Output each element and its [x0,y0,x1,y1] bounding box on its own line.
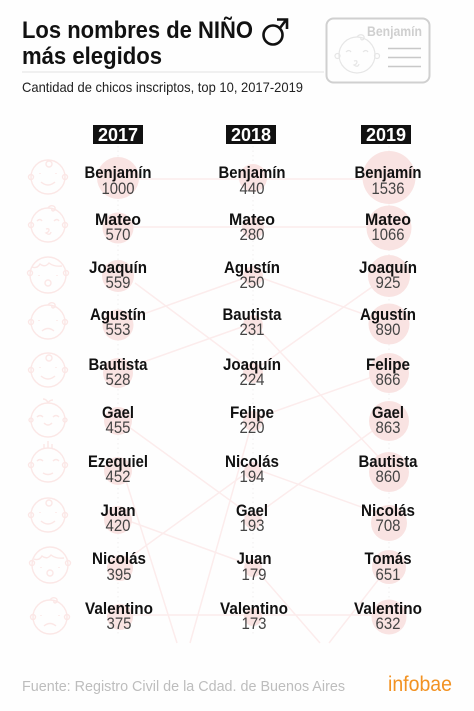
column 2019 names and values: 632 [376,615,400,633]
column 2017 names and values: Bautista [88,356,148,374]
icon: baby 2 [28,206,68,242]
bubbles 2019 [362,151,416,634]
column 2019 names and values: Benjamín [354,164,422,182]
icon: baby 1 [28,160,68,194]
icon: baby 9 [30,547,70,583]
year header 2018: 2018 [231,125,271,145]
column 2017 names and values: Agustín [90,306,146,324]
title: Los nombres de NIÑO [22,16,253,44]
icon: baby 3 [28,257,68,293]
column 2019 names and values: Nicolás [361,502,415,520]
title: más elegidos [22,43,162,70]
column 2018 names and values: Mateo [229,211,275,229]
bubbles 2018 [239,164,267,626]
column 2019 names and values: Valentino [354,600,422,618]
column 2017 names and values: Gael [102,404,134,422]
column 2018 names and values: 250 [240,274,264,292]
column 2018 names and values: 179 [242,566,266,584]
column 2019 names and values: 890 [376,321,400,339]
column 2017 names and values: 1000 [102,180,134,198]
column 2019 names and values: Felipe [366,356,410,374]
column 2018 names and values: Nicolás [225,453,279,471]
icon: name card [326,18,430,82]
column 2017 names and values: 570 [106,226,130,244]
column 2017 names and values: Ezequiel [88,453,148,471]
year header 2017: 2017 [98,125,138,145]
logo: infobae: infobae [388,673,452,696]
column 2018 names and values: 440 [240,180,264,198]
column 2017 names and values: 452 [106,468,130,486]
icon: male symbol [264,20,287,44]
column 2018 names and values: Gael [236,502,268,520]
column 2018 names and values: 173 [242,615,266,633]
column 2019 names and values: 860 [376,468,400,486]
column 2019 names and values: Bautista [358,453,418,471]
column 2017 names and values [84,164,153,633]
column 2019 names and values [354,164,422,633]
column 2017 names and values: Joaquín [89,259,147,277]
column 2017 names and values: 420 [106,517,130,535]
column 2017 names and values: 395 [106,566,132,584]
column 2018 names and values: 231 [240,321,264,339]
column 2018 names and values [218,164,288,633]
column 2017 names and values: 553 [106,321,130,339]
column 2018 names and values: 220 [240,419,264,437]
column 2018 names and values: 280 [240,226,264,244]
column 2019 names and values: 1066 [372,226,404,244]
column 2017 names and values: Benjamín [84,164,152,182]
column 2018 names and values: 193 [240,517,264,535]
column 2019 names and values: Gael [372,404,404,422]
column 2019 names and values: 1536 [372,180,404,198]
column 2017 names and values: 375 [106,615,132,633]
column 2017 names and values: Valentino [85,600,153,618]
icon: baby 7 [28,441,68,482]
column 2017 names and values: Mateo [95,211,141,229]
column 2018 names and values: Bautista [222,306,282,324]
year header 2019: 2019 [366,125,406,145]
icon: baby 10 [30,598,70,634]
column 2019 names and values: Joaquín [359,259,417,277]
column 2019 names and values: 651 [376,566,400,584]
column 2018 names and values: 224 [240,371,264,389]
column 2017 names and values: Juan [100,502,136,520]
source note: Fuente: Registro Civil de la Cdad. de Buenos Aires [22,678,345,695]
column 2018 names and values: Agustín [224,259,280,277]
baby face icons [28,160,70,634]
column 2018 names and values: Juan [236,550,272,568]
column 2019 names and values: 708 [376,517,400,535]
column 2019 names and values: 925 [376,274,400,292]
icon: name card: Benjamín [367,24,422,39]
column 2019 names and values: Mateo [365,211,411,229]
column 2019 names and values: Tomás [364,550,412,568]
icon: baby 8 [28,498,68,532]
column 2017 names and values: Nicolás [92,550,146,568]
column 2019 names and values: Agustín [360,306,416,324]
column 2017 names and values: 528 [106,371,130,389]
slope lines [118,179,389,643]
title [22,16,253,70]
column 2017 names and values: 455 [106,419,130,437]
column 2019 names and values: 863 [376,419,400,437]
column 2018 names and values: Valentino [220,600,288,618]
column 2018 names and values: Felipe [230,404,274,422]
column 2018 names and values: 194 [240,468,264,486]
column 2018 names and values: Joaquín [223,356,281,374]
column 2018 names and values: Benjamín [218,164,286,182]
icon: baby 5 [28,353,68,387]
icon: baby 4 [28,303,68,339]
column guides [118,146,389,636]
subtitle: Cantidad de chicos inscriptos, top 10, 2017-2019 [22,79,303,95]
bubbles 2017 [97,157,139,630]
column 2019 names and values: 866 [376,371,400,389]
column 2017 names and values: 559 [106,274,130,292]
icon: baby 6 [29,399,67,437]
